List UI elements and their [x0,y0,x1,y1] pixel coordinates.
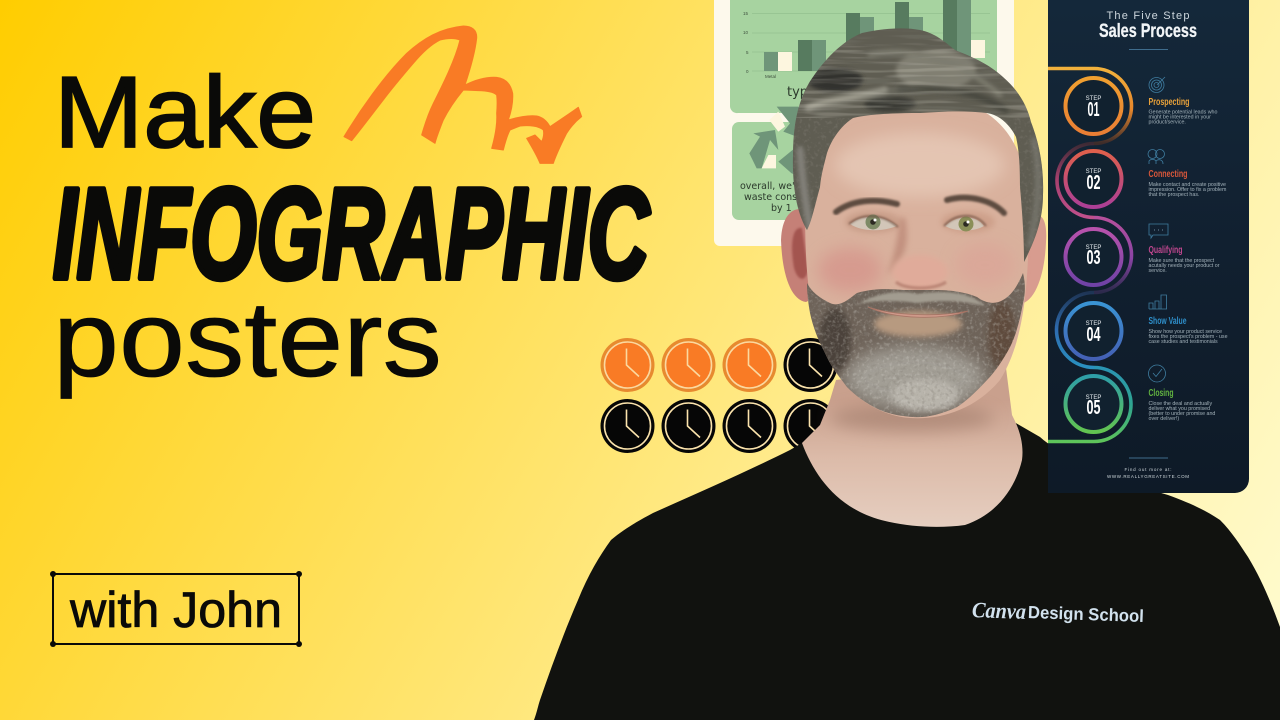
step 1 text: Prospecting [1148,96,1217,126]
step 05 ring [1066,376,1122,432]
bar chart: 15 [743,11,749,16]
summary text: by 1 [771,203,792,214]
heading: INFOGRAPHIC: INFOGRAPHIC [53,162,650,306]
step 2 text: Connecting: Make contact and create positive [1148,182,1226,188]
step 5 text: Closing: Close the deal and actually [1148,401,1212,407]
badge: with John [50,571,302,647]
black t-shirt [534,418,1280,720]
icon: recycling arrows [749,107,807,175]
step 1 text: Prospecting: Prospecting [1148,96,1190,108]
step 5 text: Closing: over deliver!) [1148,416,1179,422]
step 5 text: Closing: (better to under promise and [1148,411,1215,417]
clock row 2 [600,399,838,453]
step 02 ring: 02 [1086,172,1100,194]
step 3 text: Qualifying: service. [1148,268,1167,274]
bar chart: 0 [746,69,749,74]
step 3 text: Qualifying [1148,244,1220,274]
skin below lip [874,311,962,337]
icon: target [1149,77,1165,92]
shirt logo: Canva Design School: Design School [1028,602,1144,626]
step 4 text: Show Value: Show how your product service [1148,329,1222,335]
summary text: waste consu [744,192,803,203]
bar chart [743,0,990,79]
step 4 text: Show Value: case studies and testimonials [1148,339,1218,345]
step 02 ring: STEP [1086,169,1101,175]
bar chart: Metal [765,74,776,79]
neck shadow under beard [830,404,994,432]
hair [792,28,1044,262]
shirt logo: Canva Design School: Canva [972,597,1026,624]
icon: bar chart [1149,295,1167,309]
icon: chat [1149,224,1168,238]
bar chart: 10 [743,30,749,35]
poster: five step sales process [1048,0,1249,493]
step 03 ring: 03 [1086,247,1100,269]
step 3 text: Qualifying: Qualifying [1148,244,1182,256]
person: presenter John [534,20,1280,720]
summary text [740,181,806,214]
hair strands [800,50,1038,245]
footer [1107,467,1189,479]
panel background [1048,0,1249,493]
step 4 text: Show Value: fixes the prospect's problem - use [1148,334,1228,340]
eye socket right [941,211,995,233]
step 5 text: Closing [1148,387,1215,422]
chart caption: types [787,85,823,100]
step 04 ring: STEP [1086,321,1101,327]
beard [807,273,1025,418]
poster: green recycling report [714,0,1014,246]
cheek right [955,243,1015,287]
step 5 text: Closing: Closing [1148,387,1174,399]
poster title: The Five Step [1106,10,1190,22]
step 1 text: Prospecting: product/service. [1148,120,1186,126]
moustache [858,292,985,306]
badge: with John: with John [69,582,282,638]
heading: posters: posters [53,278,442,399]
forehead highlight [835,133,1005,197]
ear left [781,209,817,302]
heading: Make: Make [54,57,316,169]
step 4 text: Show Value: Show Value [1148,315,1187,327]
step 2 text: Connecting: that the prospect has. [1148,192,1199,198]
step 3 text: Qualifying: Make sure that the prospect [1148,258,1215,264]
step 02 ring [1066,151,1122,207]
step 2 text: Connecting: impression. Offer to fix a problem [1148,187,1227,193]
step 1 text: Prospecting: Generate potential leads who [1148,110,1217,116]
orange brush scribble [344,26,582,163]
eye right [944,216,986,232]
step 03 ring: STEP [1086,245,1101,251]
footer: WWW.REALLYGREATSITE.COM [1107,474,1189,479]
step 5 text: Closing: deliver what you promised [1148,406,1210,412]
eye left [849,214,898,230]
icon: checkmark [1148,365,1166,382]
poster title: Sales Process [1099,21,1197,42]
step 05 ring: 05 [1086,397,1100,419]
bar chart: 5 [746,50,749,55]
eye socket shadows [845,211,901,233]
step 01 ring: 01 [1088,99,1100,121]
step 04 ring: 04 [1086,324,1101,346]
step 03 ring [1066,229,1122,285]
face base [805,96,1028,418]
step 05 ring: STEP [1086,395,1101,401]
step 2 text: Connecting: Connecting [1148,168,1188,180]
step 2 text: Connecting [1148,168,1227,198]
step 01 ring [1066,78,1122,134]
step 1 text: Prospecting: might be interested in your [1148,114,1211,120]
shirt logo: Canva Design School [972,597,1144,628]
footer: Find out more at: [1124,467,1172,472]
neck [802,360,1023,527]
step 01 ring: STEP [1086,96,1101,102]
step 4 text: Show Value [1148,315,1228,345]
eyebrow left [836,201,897,212]
poster title [1099,10,1197,42]
step 04 ring [1066,303,1122,359]
cheek left [818,248,882,292]
nose [888,218,948,289]
summary text: overall, we've [740,181,806,192]
winding connector line [1048,68,1132,442]
clock row 1 [600,338,838,392]
icon: people [1148,150,1164,164]
eyebrow right [947,198,1004,213]
ear right [1014,215,1046,304]
step 3 text: Qualifying: acutally needs your product or [1148,263,1220,269]
smiling mouth [868,307,968,317]
